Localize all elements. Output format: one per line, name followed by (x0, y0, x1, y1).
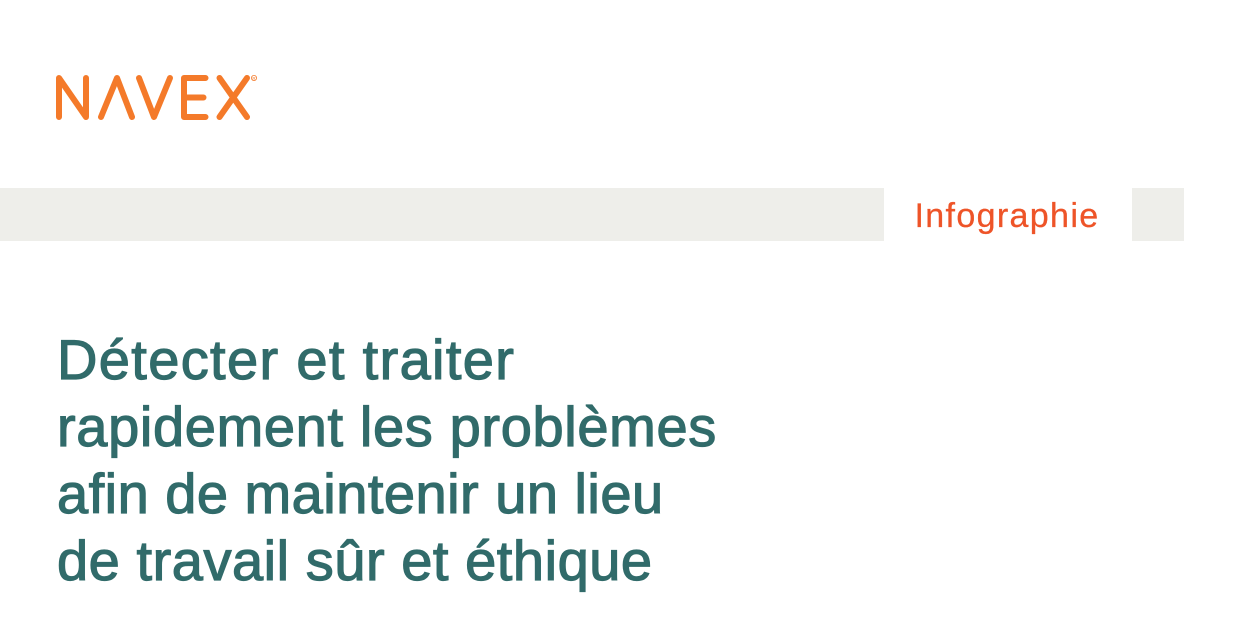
title: afin de maintenir un lieu (57, 462, 664, 525)
banner bar left (0, 188, 884, 241)
logo: NAVEX (56, 75, 257, 120)
banner bar right (1132, 188, 1184, 241)
label: Infographie: Infographie (914, 197, 1099, 235)
title: de travail sûr et éthique (57, 529, 653, 592)
title (57, 328, 717, 592)
title: Détecter et traiter (57, 328, 515, 391)
logo: NAVEX: R (252, 76, 256, 81)
title: rapidement les problèmes (57, 395, 717, 458)
